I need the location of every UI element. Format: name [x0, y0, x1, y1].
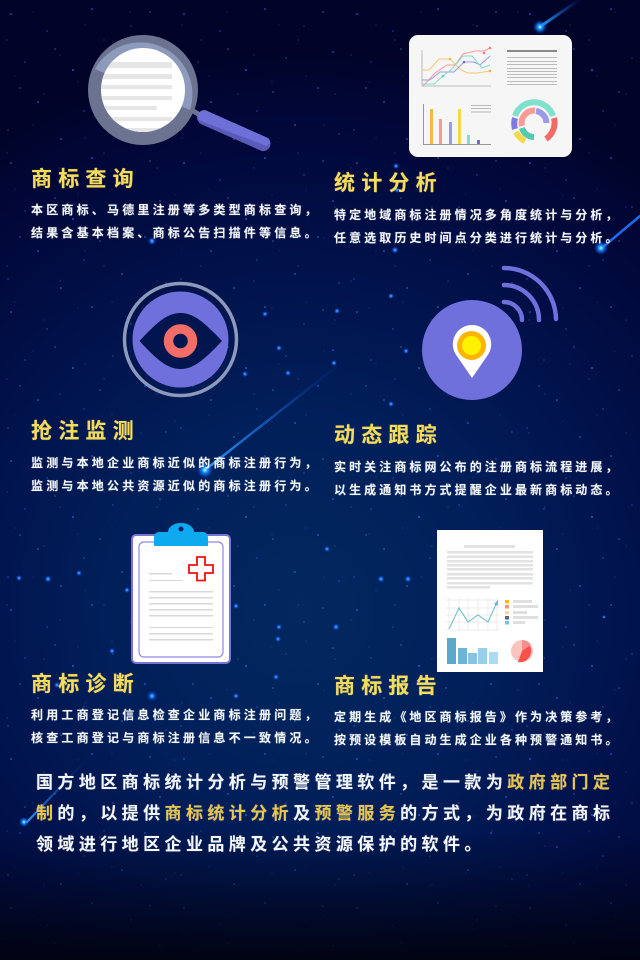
text: 商标查询 description: 结果含基本档案、商标公告扫描件等信息。 — [31, 226, 320, 240]
text: 统计分析 description — [334, 208, 621, 245]
text: 商标诊断 description — [30, 708, 320, 745]
title: 统计分析: 统计分析 — [334, 172, 443, 195]
text: product introduction: 制的，以提供商标统计分析及预警服务的方式，为政府在商标 — [36, 804, 614, 823]
text: 抢注监测 description: 监测与本地企业商标近似的商标注册行为， — [31, 456, 320, 470]
title: 抢注监测: 抢注监测 — [31, 420, 140, 443]
text: product introduction: 国方地区商标统计分析与预警管理软件，是一款为政府部门定 — [36, 773, 614, 792]
text: 商标报告 description — [334, 710, 621, 747]
title: 商标报告: 商标报告 — [334, 675, 443, 698]
text: 商标查询 description: 本区商标、马德里注册等多类型商标查询， — [31, 203, 320, 217]
text: 统计分析 description: 特定地域商标注册情况多角度统计与分析， — [334, 208, 621, 222]
text: 商标报告 description: 定期生成《地区商标报告》作为决策参考， — [334, 710, 621, 724]
text: 动态跟踪 description: 实时关注商标网公布的注册商标流程进展， — [334, 460, 621, 474]
text: 商标诊断 description: 利用工商登记信息检查企业商标注册问题， — [31, 708, 320, 722]
title: 商标诊断: 商标诊断 — [31, 673, 140, 696]
text: 商标报告 description: 按预设模板自动生成企业各种预警通知书。 — [334, 733, 621, 747]
title: 动态跟踪: 动态跟踪 — [334, 424, 443, 447]
text: 抢注监测 description: 监测与本地公共资源近似的商标注册行为。 — [31, 479, 320, 493]
icon: magnifying glass — [88, 35, 270, 152]
text: 商标诊断 description: 核查工商登记与商标注册信息不一致情况。 — [31, 731, 320, 745]
text: 抢注监测 description — [31, 456, 320, 493]
text: 动态跟踪 description — [334, 460, 621, 497]
text: 商标查询 description — [30, 203, 320, 240]
text: product introduction: 领域进行地区企业品牌及公共资源保护的软件。 — [36, 835, 486, 854]
text: 动态跟踪 description: 以生成通知书方式提醒企业最新商标动态。 — [334, 483, 621, 497]
title: 商标查询: 商标查询 — [31, 168, 140, 191]
text: 统计分析 description: 任意选取历史时间点分类进行统计与分析。 — [334, 231, 621, 245]
text: product introduction — [36, 772, 614, 854]
